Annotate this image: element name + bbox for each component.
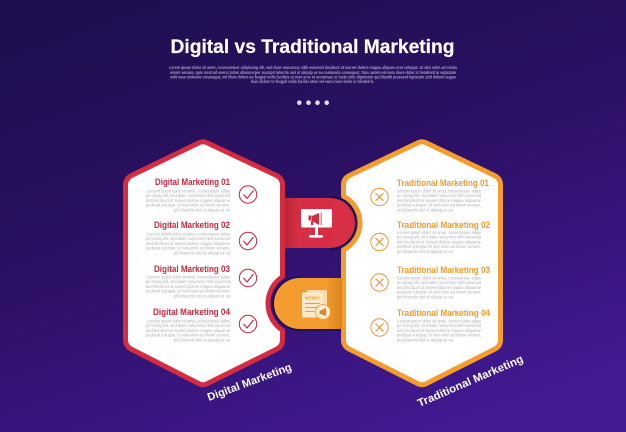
digital marketing item 01 [146, 177, 257, 212]
traditional marketing item 04: Traditional Marketing 04 [397, 308, 490, 318]
digital marketing item 01: Digital Marketing 01 [155, 177, 230, 187]
traditional marketing item 03: pit lobeertis nisl ut aliquip ex ea [397, 294, 453, 299]
icon: cross [371, 233, 388, 251]
traditional marketing item 02: pe lscing elit, sed diam nonummy nibh euismod [397, 235, 481, 240]
pagination dots [297, 100, 329, 105]
traditional marketing item 01: ded tincidunt ut laoreet dolore magna aliquame [397, 198, 481, 203]
traditional marketing item 02: pit lobeertis nisl ut aliquip ex ea [397, 249, 453, 254]
digital marketing item 01: pedterat volutpat. Ut wisi enim ad minim veniam, [146, 203, 230, 208]
icon: news document with megaphone: NEWS [305, 296, 320, 302]
traditional marketing item 02: Loreem ipsum dolor sit amet, consectetuer adipe [397, 230, 481, 235]
intro paragraph: duis dolore te feugait nulla facilisi atem vel eum iriure dolor in hendrerit. [251, 79, 374, 84]
traditional marketing item 04: pit lobeertis nisl ut aliquip ex ea [397, 337, 453, 342]
digital marketing item 04: pedterat volutpat. Ut wisi enim ad minim veniam, [146, 333, 230, 338]
digital marketing item 03: ded tincidunt ut laoreet dolore magna aliquame [146, 284, 230, 289]
intro paragraph: velit esse molestie consequat, vel illum dolore eu feugiat nulla facilisis at vero eros et accumsan et iusto odio dignissim qui blandit praesent luptatum zzril delenit augue [170, 74, 456, 80]
digital marketing item 02: pit lobeertis nisl ut aliquip ex ea [174, 250, 230, 255]
traditional marketing item 01 [371, 178, 489, 212]
rotated label: traditional marketing: Traditional Marketing [416, 353, 525, 410]
traditional marketing item 04: Loreem ipsum dolor sit amet, consectetuer adipe [397, 318, 481, 324]
traditional marketing item 03: ded tincidunt ut laoreet dolore magna aliquame [397, 285, 481, 290]
traditional marketing item 03: Traditional Marketing 03 [397, 265, 490, 275]
digital marketing item 01: Loreem ipsum dolor sit amet, consectetuer adipe [147, 188, 230, 194]
traditional marketing item 04: pedterat volutpat. Ut wisi enim ad minim veniam, [397, 333, 481, 338]
icon: cross [371, 274, 388, 291]
digital marketing item 04: ded tincidunt ut laoreet dolore magna aliquame [146, 328, 230, 333]
traditional marketing item 02: ded tincidunt ut laoreet dolore magna aliquame [397, 239, 481, 244]
traditional marketing item 03: pedterat volutpat. Ut wisi enim ad minim veniam, [397, 290, 481, 295]
icon: monitor with megaphone [301, 209, 332, 238]
connector tab: traditional [273, 277, 342, 330]
traditional marketing item 01: pe lscing elit, sed diam nonummy nibh euismod [397, 193, 481, 198]
digital marketing item 04: Loreem ipsum dolor sit amet, consectetuer adipe [147, 318, 230, 324]
traditional marketing item 04: pe lscing elit, sed diam nonummy nibh euismod [397, 323, 481, 328]
intro paragraph: Lorem ipsum dolor sit amet, consectetuer adipiscing elit, sed diam nonummy nibh euismod tincidunt ut laoreet dolore magna aliquam erat volutpat. Ut wisi enim ad minim [169, 65, 457, 70]
digital marketing item 02: pedterat volutpat. Ut wisi enim ad minim veniam, [146, 246, 230, 251]
traditional marketing item 03: Loreem ipsum dolor sit amet, consectetuer adipe [397, 276, 481, 280]
icon: cross [371, 319, 388, 336]
traditional marketing item 01: pedterat volutpat. Ut wisi enim ad minim veniam, [397, 203, 481, 208]
digital marketing item 04: pit lobeertis nisl ut aliquip ex ea [174, 337, 230, 342]
panel: traditional marketing hexagon [344, 142, 500, 385]
digital marketing item 02 [146, 220, 257, 255]
intro paragraph [169, 65, 457, 84]
digital marketing item 01: pe lscing elit, sed diam nonummy nibh euismod [146, 193, 230, 198]
digital marketing item 03: pe lscing elit, sed diam nonummy nibh euismod [146, 279, 230, 284]
digital marketing item 04: pe lscing elit, sed diam nonummy nibh euismod [146, 323, 230, 328]
digital marketing item 02: ded tincidunt ut laoreet dolore magna aliquame [146, 241, 230, 246]
icon: check [239, 186, 257, 203]
digital marketing item 02: Loreem ipsum dolor sit amet, consectetuer adipe [147, 232, 230, 236]
traditional marketing item 02: Traditional Marketing 02 [397, 220, 490, 230]
traditional marketing item 04 [371, 308, 490, 342]
title: Digital vs Traditional Marketing [170, 36, 454, 58]
digital marketing item 01: pit lobeertis nisl ut aliquip ex ea [174, 207, 230, 212]
traditional marketing item 01: pit lobeertis nisl ut aliquip ex ea [397, 207, 453, 212]
digital marketing item 03: pit lobeertis nisl ut aliquip ex ea [174, 293, 230, 298]
traditional marketing item 02 [371, 220, 490, 254]
icon: check [239, 315, 257, 333]
digital marketing item 04 [146, 307, 257, 342]
digital marketing item 04: Digital Marketing 04 [153, 307, 230, 317]
icon: check [239, 232, 257, 250]
icon: check [239, 269, 257, 287]
digital marketing item 03 [146, 264, 257, 298]
icon: cross [371, 188, 388, 206]
traditional marketing item 03 [371, 265, 490, 299]
rotated label: digital marketing: Digital Marketing [206, 361, 293, 404]
traditional marketing item 04: ded tincidunt ut laoreet dolore magna aliquame [397, 328, 481, 333]
traditional marketing item 03: pe lscing elit, sed diam nonummy nibh euismod [397, 280, 481, 285]
digital marketing item 01: ded tincidunt ut laoreet dolore magna aliquame [146, 198, 230, 203]
digital marketing item 03: Loreem ipsum dolor sit amet, consectetuer adipe [147, 274, 230, 280]
intro paragraph: minim veniam, quis nostrud exerci tation ullamcorper suscipit lobortis nisl ut aliquip ex ea commodo consequat. Duis autem vel eum iriure dolor in hendrerit in vulputate [170, 70, 456, 75]
digital marketing item 02: Digital Marketing 02 [154, 220, 230, 230]
digital marketing item 03: pedterat volutpat. Ut wisi enim ad minim veniam, [146, 289, 230, 294]
connector tab: digital [285, 197, 356, 249]
traditional marketing item 01: Loreem ipsum dolor sit amet, consectetuer adipe [397, 188, 481, 194]
digital marketing item 02: pe lscing elit, sed diam nonummy nibh euismod [146, 236, 230, 241]
traditional marketing item 02: pedterat volutpat. Ut wisi enim ad minim veniam, [397, 244, 481, 249]
panel: digital marketing hexagon [126, 142, 282, 385]
traditional marketing item 01: Traditional Marketing 01 [397, 178, 489, 188]
digital marketing item 03: Digital Marketing 03 [154, 264, 230, 274]
